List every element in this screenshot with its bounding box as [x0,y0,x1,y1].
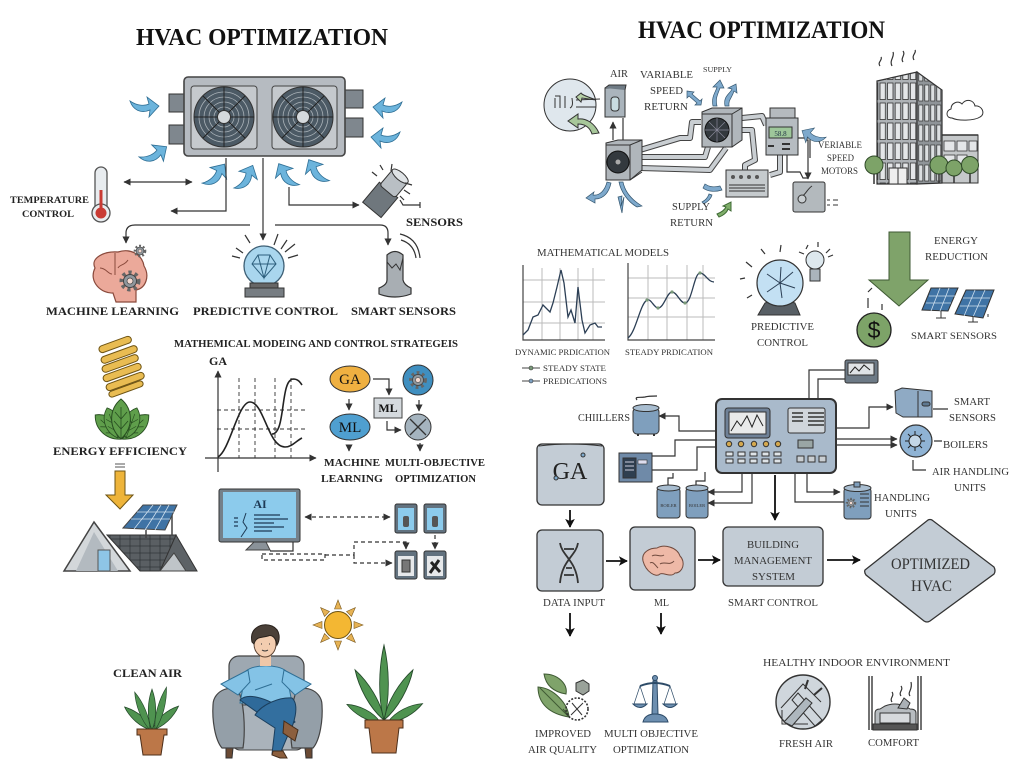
arrows: supply and return flow [586,80,828,213]
dashed connectors: AI to devices [262,517,435,563]
labels: machine learning, multi-objective optimization: MULTI-OBJECTIVE [385,457,485,469]
label: multi objective optimization [604,729,698,756]
icon: chiller tank [633,396,659,436]
label: smart sensors top: SMART SENSORS [911,332,997,342]
labels: machine learning, predictive control, smart sensors: SMART SENSORS [351,304,456,318]
icon: predictive control crystal ball [232,234,298,297]
labels: veriable speed motors: VERIABLE [818,141,862,151]
connector lines: control panel [652,370,948,503]
diagram: GA and ML flow: GA [339,372,361,388]
labels: machine learning, predictive control, smart sensors: MACHINE LEARNING [46,304,179,318]
labels: machine learning, multi-objective optimization [321,457,485,485]
icon: house with solar panel [64,505,197,571]
icon: smart sensor with signal [379,234,420,297]
label: energy reduction [925,236,988,263]
label: predictive control: CONTROL [757,338,808,349]
icons: boiler cylinders [657,472,708,518]
icon: energy coil [98,335,145,398]
label: predictive control: PREDICTIVE [751,322,814,333]
label: temperature control: TEMPERATURE [10,196,89,206]
box: building management system: MANAGEMENT [734,555,812,567]
label: handling units: HANDLING [874,492,930,504]
box: GA: GA [553,459,588,485]
label: smart sensors lower: SMART [954,397,991,408]
chart: GA line chart: GA [209,354,227,368]
labels: machine learning, multi-objective optimization: OPTIMIZATION [395,473,476,485]
icon: small monitor [845,360,878,383]
icon: HVAC unit with two fans [169,77,363,156]
legend: steady state, predications: PREDICATIONS [543,376,607,386]
label: predictive control [751,322,814,349]
decision: optimized HVAC: HVAC [911,578,952,595]
box: data input DNA [537,530,603,591]
chart labels: dynamic and steady: STEADY PRDICATION [625,347,713,357]
icon: balance scale [633,676,677,722]
label: improved air quality [528,729,597,756]
box: ML brain [630,527,695,590]
label: energy reduction: REDUCTION [925,252,988,263]
labels: veriable speed motors: SPEED [827,154,854,164]
icons: boiler cylinders: BOILER [660,503,677,508]
labels: machine learning, multi-objective optimization: MACHINE [324,457,380,469]
decision: optimized HVAC: OPTIMIZED [891,556,970,573]
icon: green leaves [90,399,154,445]
icon: room air circle [544,79,600,134]
chart labels: dynamic and steady [515,347,713,357]
legend: steady state, predications: STEADY STATE [543,363,606,373]
label: chillers: CHIILLERS [578,412,630,424]
diagram: air system with ducts: 58.8 [774,130,787,138]
label: comfort: COMFORT [868,738,919,749]
decision: optimized HVAC [865,520,995,622]
label: energy efficiency: ENERGY EFFICIENCY [53,444,187,458]
labels: machine learning, predictive control, smart sensors: PREDICTIVE CONTROL [193,304,338,318]
label: multi objective optimization: MULTI OBJECTIVE [604,729,698,740]
icon: air conditioning unit [619,453,652,482]
labels: air, variable speed return, supply: SPEED [650,86,683,97]
icon: solar panels [922,288,994,322]
labels: air, variable speed return, supply: RETURN [644,102,688,113]
panel: left infographic [10,25,485,758]
heading: mathematical models: MATHEMATICAL MODELS [537,248,669,259]
icon: brain with gears [93,246,147,302]
labels: machine learning, predictive control, smart sensors [46,304,456,318]
labels: data input, ML, smart control: DATA INPUT [543,598,605,609]
arrow: green return [717,202,731,217]
labels: air, variable speed return, supply: VARIABLE [640,70,693,81]
diagram: building control panel [716,399,836,473]
label: handling units: UNITS [885,508,917,520]
illustration: person in armchair [213,625,322,758]
connector lines: left unit [124,158,388,245]
labels: veriable speed motors: MOTORS [821,167,858,177]
labels: machine learning, multi-objective optimization: LEARNING [321,473,383,485]
labels: boilers, air handling units: AIR HANDLING [932,467,1009,478]
labels: data input, ML, smart control: ML [654,598,669,609]
label: multi objective optimization: OPTIMIZATION [613,745,689,756]
icon: predictive control globe and bulb [740,242,833,315]
label: sensors: SENSORS [406,217,463,229]
arrow: yellow down arrow [106,464,133,509]
icon: AI monitor [219,489,300,550]
labels: supply return [670,201,713,229]
arrow: energy reduction [869,232,928,306]
chart labels: dynamic and steady: DYNAMIC PRDICATION [515,347,610,357]
icon: thermometer [92,167,110,222]
icon: improved air quality [538,674,589,720]
chart: dynamic prediction [523,265,605,340]
icon: comfort armchair [869,676,921,730]
label: improved air quality: AIR QUALITY [528,745,597,756]
heading: mathematical modeling: MATHEMICAL MODEING AND CONTROL STRATEGEIS [174,339,458,350]
chart: GA line chart [205,354,316,472]
box: building management system [723,527,823,586]
label: improved air quality: IMPROVED [535,729,591,740]
labels: data input, ML, smart control: SMART CONTROL [728,597,818,609]
labels: air, variable speed return, supply: AIR [610,69,628,80]
labels: air, variable speed return, supply: SUPPLY [703,65,733,74]
labels: boilers, air handling units: BOILERS [943,440,988,451]
box: GA [537,444,604,505]
illustration: office building with trees and cloud [865,50,983,184]
icon: smart sensor box [895,388,932,417]
labels: supply return: SUPPLY [672,201,710,213]
chart: steady prediction [628,263,715,340]
heading: healthy indoor environment: HEALTHY INDOOR ENVIRONMENT [763,657,950,669]
labels: data input, ML, smart control [543,597,818,609]
icon: sensor [363,164,420,218]
label: smart sensors lower: SENSORS [949,413,996,424]
icon: large plant [345,645,424,753]
title: right: HVAC OPTIMIZATION [638,17,885,44]
labels: air, variable speed return, supply [610,65,733,113]
icon: handling unit [844,482,871,519]
icons: boiler cylinders: BOILER [689,503,705,508]
panel: right infographic [515,17,1009,756]
box: building management system: BUILDING [747,539,799,551]
legend: steady state, predications [522,363,607,386]
icon: AI monitor: AI [253,497,267,511]
labels: boilers, air handling units [932,440,1009,494]
label: temperature control: CONTROL [22,210,74,220]
label: energy reduction: ENERGY [934,236,978,247]
icons: blue air flow arrows [130,97,402,196]
labels: veriable speed motors [818,141,862,177]
label: clean air: CLEAN AIR [113,666,182,680]
label: fresh air: FRESH AIR [779,739,833,750]
diagram: GA and ML flow: ML [378,401,398,415]
icon: fresh air [776,675,830,729]
diagram: air system with ducts [605,85,838,212]
box: building management system: SYSTEM [752,571,795,583]
icon: small plant [122,686,181,755]
icon: sun [313,600,363,650]
icon: boiler dial [900,425,932,457]
labels: supply return: RETURN [670,217,713,229]
arrows: process flow [570,475,860,636]
diagram: GA and ML flow: ML [339,420,361,436]
title: left: HVAC OPTIMIZATION [136,25,389,51]
labels: boilers, air handling units: UNITS [954,483,986,494]
icons: smart devices [395,504,446,579]
label: smart sensors lower [949,397,996,424]
label: handling units [874,492,930,520]
diagram: GA and ML flow [330,365,433,451]
icon: dollar coin: $ [868,317,881,343]
label: temperature control [10,196,89,220]
icon: dollar coin [857,288,891,347]
